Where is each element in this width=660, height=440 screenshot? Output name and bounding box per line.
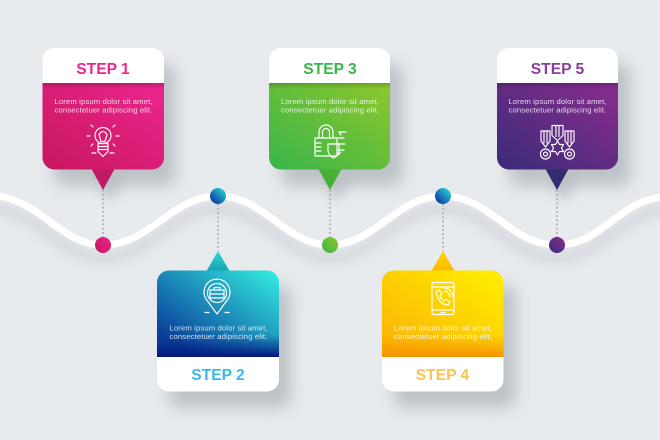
body text: Lorem ipsum dolor sit amet, xyxy=(508,97,607,106)
heading: STEP 3 xyxy=(303,61,357,78)
wave shadow xyxy=(0,208,660,258)
icon: padlock shield xyxy=(315,125,346,158)
body text: Lorem ipsum dolor sit amet, xyxy=(281,97,379,106)
header xyxy=(42,48,164,83)
card body xyxy=(497,83,618,170)
body text: consectetuer adipiscing elit. xyxy=(170,332,267,341)
connector: step 5 xyxy=(556,190,558,238)
footer xyxy=(157,357,279,392)
panel: step 3 xyxy=(269,48,403,204)
pointer xyxy=(92,169,114,190)
panel: step 2 xyxy=(157,251,291,408)
connector: step 4 xyxy=(442,204,444,251)
icon: light bulb xyxy=(87,125,119,156)
node: step 5 xyxy=(549,237,565,253)
card body xyxy=(382,270,504,357)
connector: step 3 xyxy=(329,190,331,238)
body text: consectetuer adipiscing elit. xyxy=(394,332,492,341)
node: step 2 xyxy=(210,188,226,204)
body text: consectetuer adipiscing elit. xyxy=(281,106,379,114)
pointer xyxy=(432,251,454,271)
card body xyxy=(42,83,164,170)
card body xyxy=(269,83,390,170)
wave line xyxy=(0,195,660,245)
heading: STEP 1 xyxy=(76,61,130,78)
body text: Lorem ipsum dolor sit amet, xyxy=(394,324,492,332)
heading: STEP 4 xyxy=(416,367,470,384)
node: step 1 xyxy=(95,237,111,253)
footer xyxy=(382,357,504,392)
header xyxy=(497,48,618,83)
pointer xyxy=(546,169,568,190)
connector: step 1 xyxy=(102,190,104,238)
header xyxy=(269,48,390,83)
card body xyxy=(157,270,279,357)
pointer xyxy=(206,251,230,271)
panel: step 5 xyxy=(497,48,631,204)
body text: consectetuer adipiscing elit. xyxy=(54,106,152,114)
panel: step 1 xyxy=(42,48,176,204)
connector: step 2 xyxy=(217,204,219,251)
node: step 4 xyxy=(435,188,451,204)
pointer xyxy=(318,169,342,190)
node: step 3 xyxy=(322,237,338,253)
heading: STEP 2 xyxy=(191,367,245,384)
panel: step 4 xyxy=(382,251,516,408)
body text: Lorem ipsum dolor sit amet, xyxy=(170,324,268,332)
body text: consectetuer adipiscing elit. xyxy=(508,106,606,114)
icon: medals xyxy=(540,126,574,159)
icon: map pin briefcase xyxy=(204,279,230,314)
body text: Lorem ipsum dolor sit amet, xyxy=(54,97,153,106)
heading: STEP 5 xyxy=(531,61,585,78)
icon: phone call xyxy=(432,282,454,314)
